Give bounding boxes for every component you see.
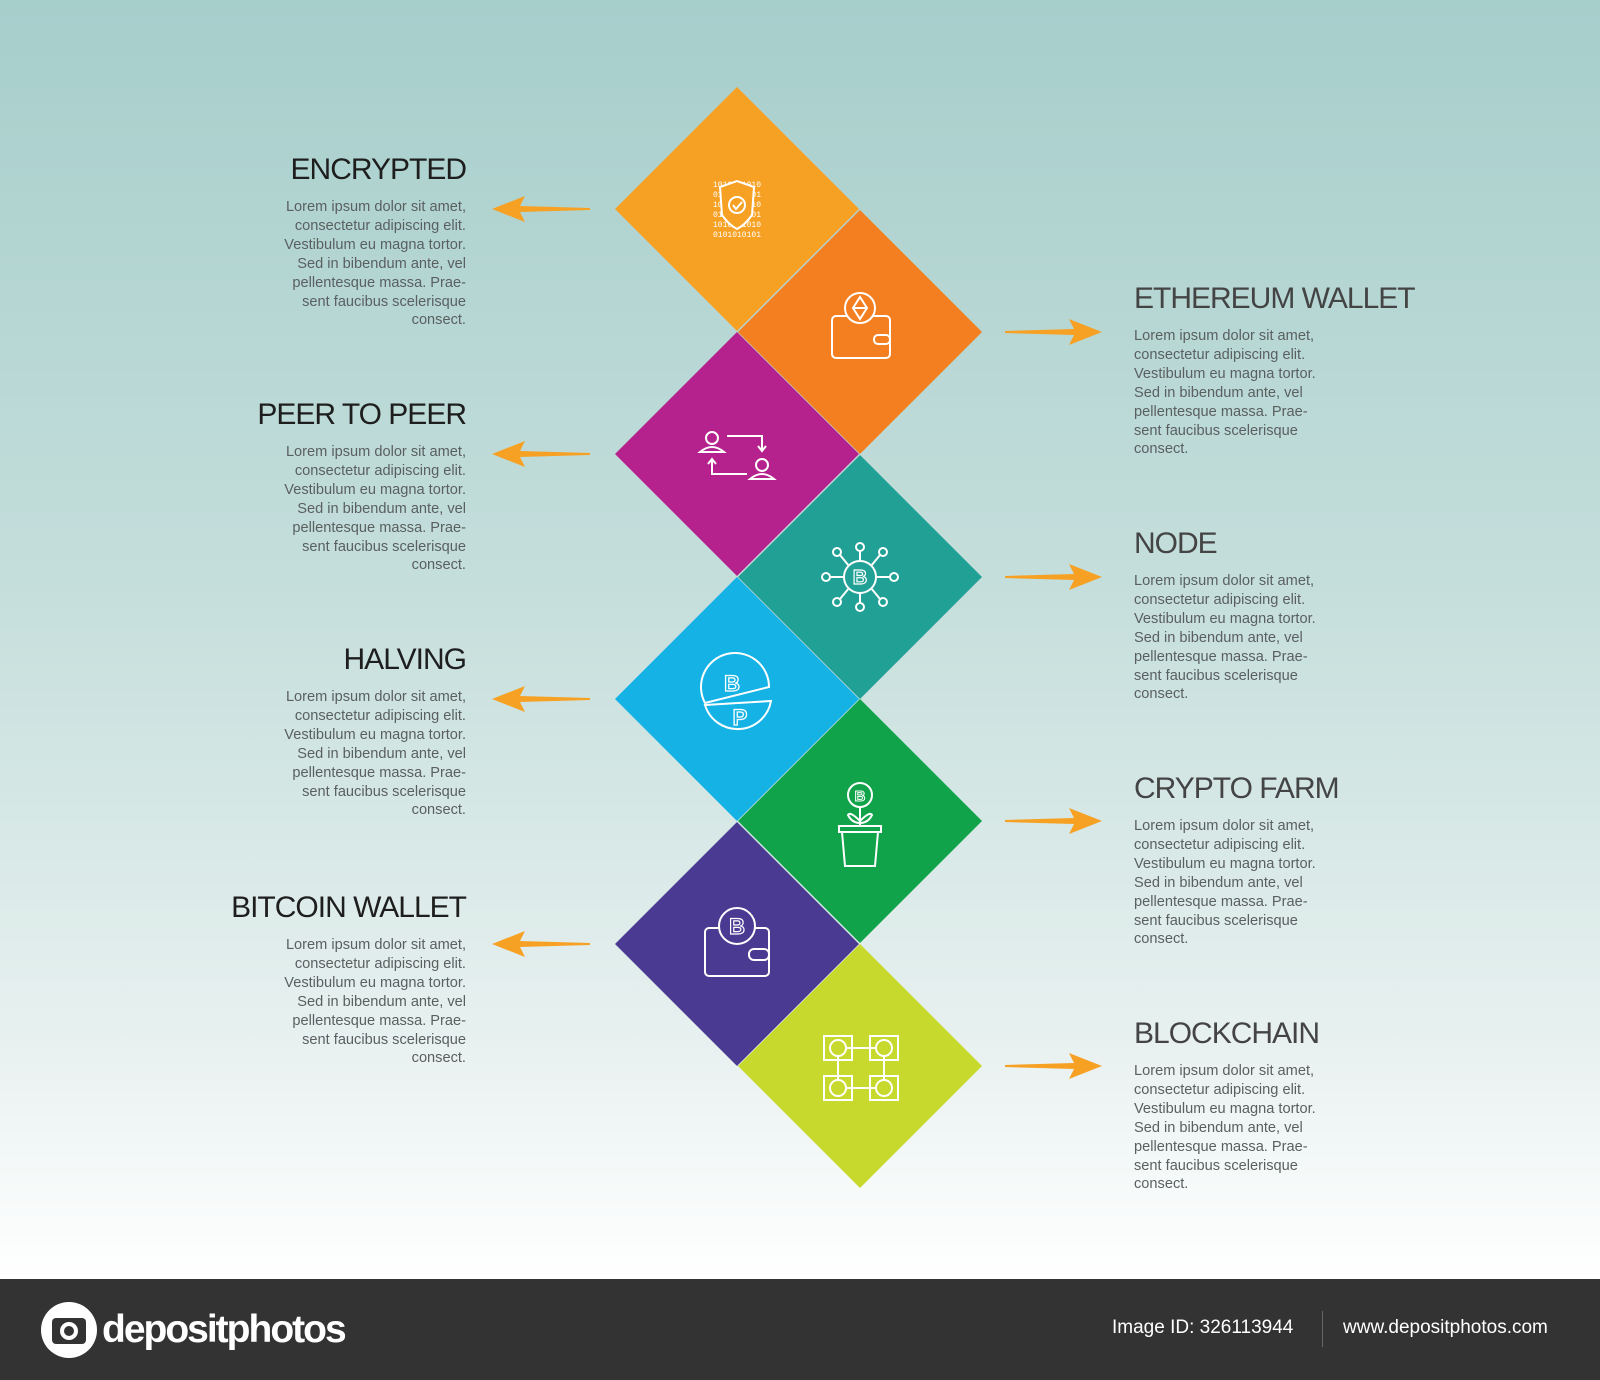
icon: encrypted shield	[713, 181, 761, 240]
text: ethereum wallet: Lorem ipsum dolor sit amet,	[1134, 328, 1314, 344]
footer url: www.depositphotos.com	[1343, 1317, 1548, 1338]
text: peer to peer: Vestibulum eu magna tortor.	[284, 482, 466, 498]
arrow: encrypted	[492, 196, 590, 222]
text: bitcoin wallet: Sed in bibendum ante, vel	[297, 994, 466, 1010]
footer logo	[41, 1302, 346, 1358]
text: blockchain: Vestibulum eu magna tortor.	[1134, 1101, 1316, 1117]
icon: encrypted shield: 1010101010	[713, 181, 761, 190]
text: peer to peer: consect.	[412, 557, 466, 573]
icon: crypto farm	[839, 783, 881, 866]
text: blockchain: consectetur adipiscing elit.	[1134, 1082, 1305, 1098]
text: encrypted: sent faucibus scelerisque	[302, 294, 466, 310]
icon: blockchain	[824, 1036, 898, 1100]
text: crypto farm	[1134, 772, 1339, 947]
text: crypto farm: sent faucibus scelerisque	[1134, 913, 1298, 929]
text: blockchain: sent faucibus scelerisque	[1134, 1158, 1298, 1174]
diamond: encrypted	[615, 87, 859, 331]
text: bitcoin wallet: Lorem ipsum dolor sit amet,	[286, 937, 466, 953]
text: crypto farm: consect.	[1134, 931, 1188, 947]
icon: crypto farm: B	[855, 788, 866, 805]
text: ethereum wallet: Vestibulum eu magna tortor.	[1134, 366, 1316, 382]
text: halving: Vestibulum eu magna tortor.	[284, 727, 466, 743]
text: node: sent faucibus scelerisque	[1134, 668, 1298, 684]
text: bitcoin wallet: pellentesque massa. Prae-	[292, 1013, 466, 1029]
text: ethereum wallet: consectetur adipiscing elit.	[1134, 347, 1305, 363]
text: encrypted: pellentesque massa. Prae-	[292, 275, 466, 291]
text: crypto farm: Sed in bibendum ante, vel	[1134, 875, 1303, 891]
arrow: peer to peer	[492, 441, 590, 467]
diamond: peer to peer	[615, 332, 859, 576]
icon: halving	[701, 653, 771, 730]
diamond: halving	[615, 577, 859, 821]
text: encrypted	[284, 153, 466, 328]
text: blockchain	[1134, 1017, 1319, 1192]
icon: node	[822, 543, 898, 611]
footer logo: depositphotos	[102, 1308, 345, 1351]
icon: ethereum wallet	[832, 293, 890, 358]
text: node: Vestibulum eu magna tortor.	[1134, 611, 1316, 627]
icon: encrypted shield: 1010101010	[713, 221, 761, 230]
text: halving	[284, 643, 466, 818]
text: halving: pellentesque massa. Prae-	[292, 765, 466, 781]
text: node	[1134, 527, 1316, 702]
text: peer to peer: pellentesque massa. Prae-	[292, 520, 466, 536]
text: crypto farm: Vestibulum eu magna tortor.	[1134, 856, 1316, 872]
text: encrypted: consectetur adipiscing elit.	[295, 218, 466, 234]
text: node: pellentesque massa. Prae-	[1134, 649, 1308, 665]
arrow: bitcoin wallet	[492, 931, 590, 957]
text: node: Lorem ipsum dolor sit amet,	[1134, 573, 1314, 589]
text: encrypted: Vestibulum eu magna tortor.	[284, 237, 466, 253]
diamond: bitcoin wallet	[615, 822, 859, 1066]
text: blockchain: Lorem ipsum dolor sit amet,	[1134, 1063, 1314, 1079]
text: halving: consectetur adipiscing elit.	[295, 708, 466, 724]
icon: halving: P	[733, 705, 747, 730]
text: ethereum wallet: Sed in bibendum ante, vel	[1134, 385, 1303, 401]
text: node: consectetur adipiscing elit.	[1134, 592, 1305, 608]
text: encrypted: ENCRYPTED	[291, 153, 466, 186]
icon: peer to peer	[700, 432, 774, 479]
text: blockchain: consect.	[1134, 1176, 1188, 1192]
text: crypto farm: consectetur adipiscing elit.	[1134, 837, 1305, 853]
diamond: ethereum wallet	[738, 210, 982, 454]
arrow: halving	[492, 686, 590, 712]
arrow: ethereum wallet	[1005, 319, 1102, 345]
text: bitcoin wallet: BITCOIN WALLET	[231, 891, 466, 924]
text: bitcoin wallet	[231, 891, 466, 1066]
text: blockchain: pellentesque massa. Prae-	[1134, 1139, 1308, 1155]
text: encrypted: Sed in bibendum ante, vel	[297, 256, 466, 272]
text: halving: HALVING	[344, 643, 466, 676]
text: peer to peer: sent faucibus scelerisque	[302, 539, 466, 555]
icon: encrypted shield: 0101010101	[713, 211, 761, 220]
text: halving: Lorem ipsum dolor sit amet,	[286, 689, 466, 705]
diamond: crypto farm	[738, 699, 982, 943]
icon: encrypted shield: 1010101010	[713, 201, 761, 210]
text: ethereum wallet	[1134, 282, 1415, 457]
text: peer to peer: consectetur adipiscing elit.	[295, 463, 466, 479]
text: bitcoin wallet: Vestibulum eu magna tortor.	[284, 975, 466, 991]
text: peer to peer: Sed in bibendum ante, vel	[297, 501, 466, 517]
icon: encrypted shield: 0101010101	[713, 231, 761, 240]
text: encrypted: Lorem ipsum dolor sit amet,	[286, 199, 466, 215]
text: crypto farm: pellentesque massa. Prae-	[1134, 894, 1308, 910]
text: ethereum wallet: sent faucibus scelerisque	[1134, 423, 1298, 439]
arrow: crypto farm	[1005, 808, 1102, 834]
arrow: blockchain	[1005, 1053, 1102, 1079]
text: crypto farm: Lorem ipsum dolor sit amet,	[1134, 818, 1314, 834]
arrow: node	[1005, 564, 1102, 590]
icon: encrypted shield: 0101010101	[713, 191, 761, 200]
diamond: node	[738, 455, 982, 699]
text: halving: Sed in bibendum ante, vel	[297, 746, 466, 762]
text: bitcoin wallet: sent faucibus scelerisque	[302, 1032, 466, 1048]
text: crypto farm: CRYPTO FARM	[1134, 772, 1339, 805]
text: node: NODE	[1134, 527, 1217, 560]
text: bitcoin wallet: consectetur adipiscing elit.	[295, 956, 466, 972]
icon: bitcoin wallet: B	[729, 914, 745, 939]
text: peer to peer: Lorem ipsum dolor sit amet,	[286, 444, 466, 460]
text: ethereum wallet: pellentesque massa. Prae-	[1134, 404, 1308, 420]
footer	[0, 1279, 1600, 1380]
text: halving: consect.	[412, 802, 466, 818]
icon: halving: B	[724, 671, 740, 696]
text: bitcoin wallet: consect.	[412, 1050, 466, 1066]
text: blockchain: BLOCKCHAIN	[1134, 1017, 1319, 1050]
icon: bitcoin wallet	[705, 908, 769, 976]
text: node: consect.	[1134, 686, 1188, 702]
text: blockchain: Sed in bibendum ante, vel	[1134, 1120, 1303, 1136]
text: ethereum wallet: consect.	[1134, 441, 1188, 457]
text: halving: sent faucibus scelerisque	[302, 784, 466, 800]
footer image id: Image ID: 326113944	[1112, 1317, 1293, 1338]
icon: node: B	[853, 567, 867, 589]
text: peer to peer	[257, 398, 466, 573]
text: ethereum wallet: ETHEREUM WALLET	[1134, 282, 1415, 315]
diamond: blockchain	[738, 944, 982, 1188]
text: encrypted: consect.	[412, 312, 466, 328]
text: peer to peer: PEER TO PEER	[257, 398, 466, 431]
text: node: Sed in bibendum ante, vel	[1134, 630, 1303, 646]
